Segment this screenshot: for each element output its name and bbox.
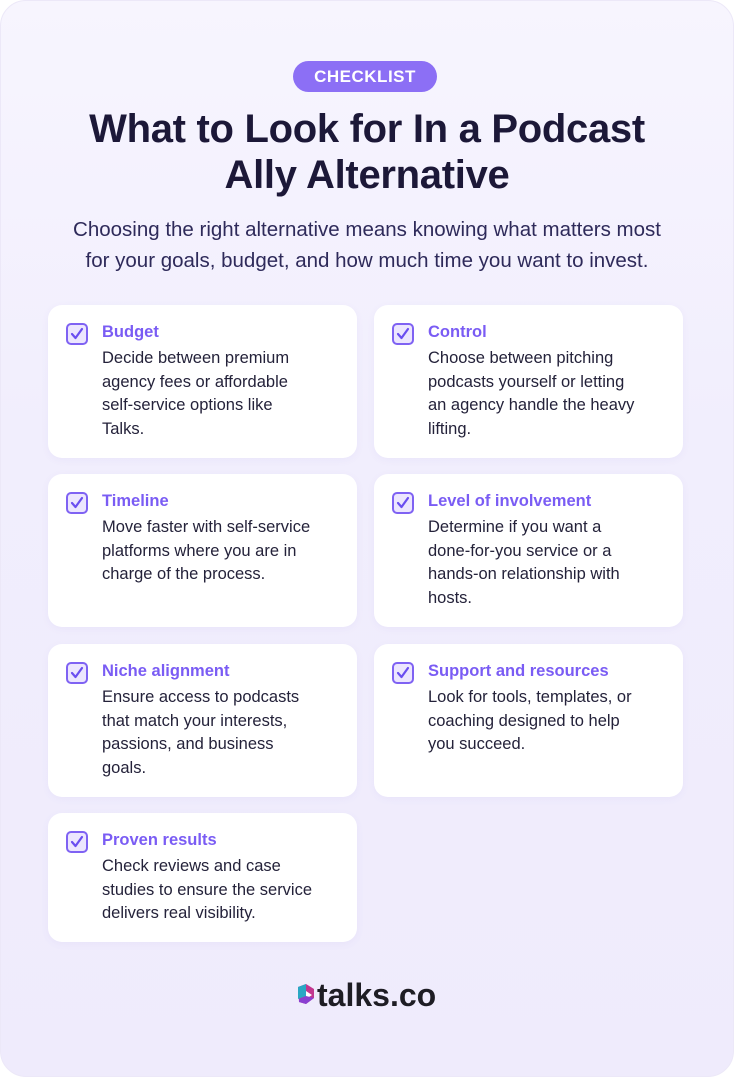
card text	[102, 349, 289, 438]
icon: checkbox	[66, 492, 88, 514]
card title: Budget	[102, 323, 159, 341]
icon: checkbox	[66, 323, 88, 345]
card: niche alignment	[48, 644, 357, 797]
badge: checklist: CHECKLIST	[314, 67, 416, 86]
card text: goals.	[102, 758, 146, 776]
card: level of involvement	[374, 474, 683, 627]
card: budget	[48, 305, 357, 458]
logo: talks.co	[298, 977, 436, 1013]
card text: Decide between premium	[102, 349, 289, 367]
card title: Support and resources	[428, 662, 609, 680]
card text	[428, 349, 634, 438]
card text: Check reviews and case	[102, 857, 281, 875]
card title: Timeline	[102, 492, 169, 510]
icon: checkbox	[66, 662, 88, 684]
icon: checkbox	[392, 492, 414, 514]
card: timeline	[48, 474, 357, 627]
subtitle: Choosing the right alternative means knowing what matters most	[73, 218, 661, 241]
card text: you succeed.	[428, 735, 525, 753]
card: support and resources	[374, 644, 683, 797]
icon: checkbox	[66, 831, 88, 853]
card text: passions, and business	[102, 735, 274, 753]
card text: self-service options like	[102, 396, 273, 414]
card text	[428, 518, 620, 606]
card text: lifting.	[428, 420, 471, 438]
card text: charge of the process.	[102, 565, 265, 583]
card text: hosts.	[428, 588, 472, 606]
card text: that match your interests,	[102, 712, 287, 730]
badge: checklist	[293, 61, 437, 92]
title: What to Look for In a Podcast	[89, 107, 645, 151]
card text: hands-on relationship with	[428, 565, 620, 583]
card text: delivers real visibility.	[102, 904, 256, 922]
card text: platforms where you are in	[102, 542, 296, 560]
subtitle	[73, 218, 661, 272]
card text	[428, 688, 632, 753]
card text: Choose between pitching	[428, 349, 613, 367]
card: proven results	[48, 813, 357, 942]
card title: Level of involvement	[428, 492, 591, 510]
icon: checkbox	[392, 662, 414, 684]
card text: coaching designed to help	[428, 712, 620, 730]
subtitle: for your goals, budget, and how much time you want to invest.	[86, 249, 648, 272]
card title: Proven results	[102, 831, 217, 849]
card text: Talks.	[102, 420, 144, 438]
card text: Move faster with self-service	[102, 518, 310, 536]
icon: logo mark	[298, 984, 314, 1004]
card text: Determine if you want a	[428, 518, 601, 536]
title	[89, 107, 645, 197]
card: control	[374, 305, 683, 458]
card title: Control	[428, 323, 487, 341]
card text: Ensure access to podcasts	[102, 688, 299, 706]
card text: done-for-you service or a	[428, 542, 611, 560]
card text: studies to ensure the service	[102, 880, 312, 898]
card text: agency fees or affordable	[102, 372, 288, 390]
card text	[102, 518, 310, 583]
card text: an agency handle the heavy	[428, 396, 634, 414]
icon: checkbox	[392, 323, 414, 345]
card text	[102, 857, 312, 922]
card title: Niche alignment	[102, 662, 229, 680]
title: Ally Alternative	[225, 153, 509, 197]
logo text: talks.co	[317, 977, 436, 1013]
card text: podcasts yourself or letting	[428, 372, 624, 390]
card text	[102, 688, 299, 776]
card text: Look for tools, templates, or	[428, 688, 632, 706]
